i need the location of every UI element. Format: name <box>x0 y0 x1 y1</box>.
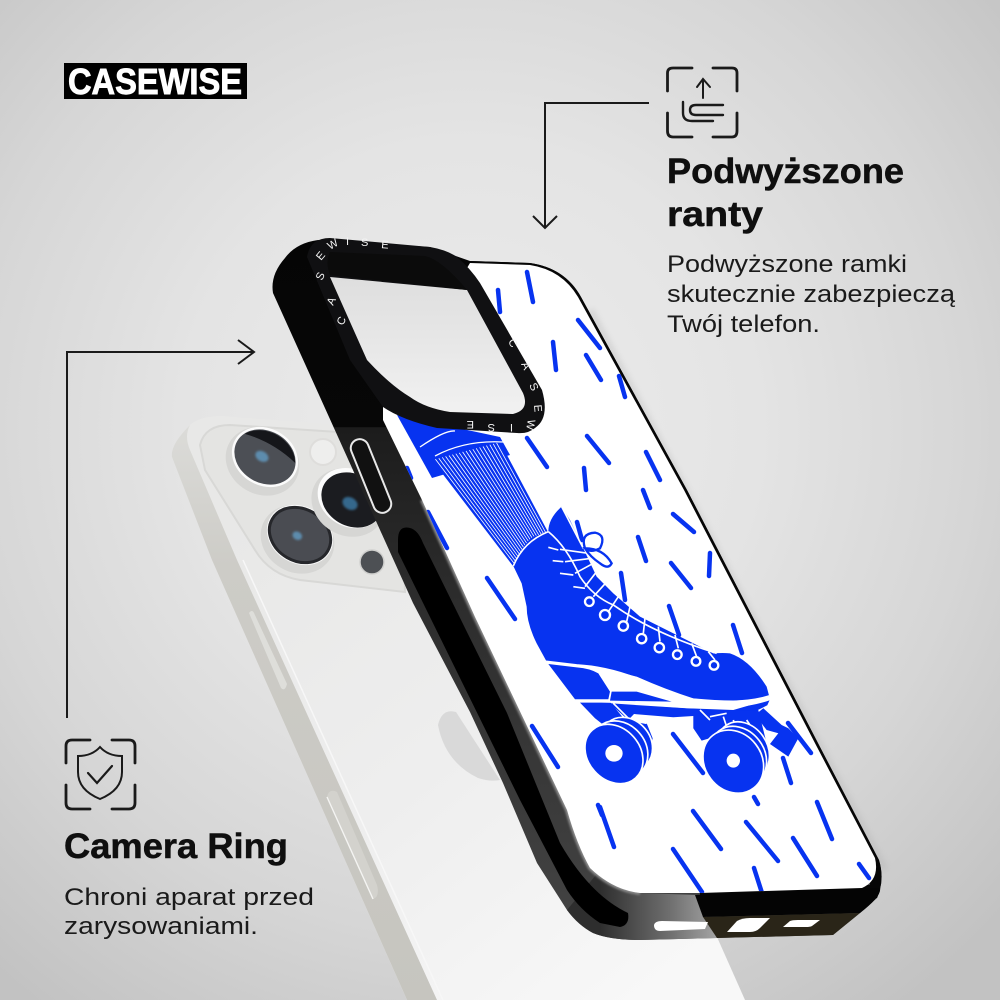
ring inner wall <box>328 252 467 290</box>
back highlight <box>243 560 443 1000</box>
logo: CASEWISE <box>68 61 242 102</box>
right bezel <box>470 261 882 900</box>
side button upper <box>249 611 287 689</box>
rear wheel <box>690 712 780 805</box>
laces <box>548 532 717 660</box>
rain dashes <box>407 272 869 893</box>
sole strip <box>610 692 672 702</box>
rear truck <box>580 703 653 757</box>
front truck <box>693 710 767 770</box>
camera ring <box>307 236 545 433</box>
toe stop <box>755 708 798 757</box>
phone side band <box>172 425 437 1000</box>
side button pill <box>348 436 394 516</box>
icon: shield <box>66 740 135 809</box>
port usb <box>727 918 770 932</box>
eyelets <box>585 597 718 670</box>
port speaker left <box>654 921 708 931</box>
side slot <box>398 528 628 927</box>
arrow: raised edges <box>533 103 649 228</box>
sock stripes <box>432 442 548 566</box>
heading: raised edges: ranty <box>667 195 764 234</box>
boot <box>513 507 769 700</box>
text: raised edges <box>667 251 956 338</box>
side button lower <box>327 791 378 899</box>
text: raised edges: Podwyższone ramki <box>667 251 907 278</box>
case shadow <box>590 310 885 870</box>
sensor <box>360 550 384 574</box>
plate <box>610 699 770 720</box>
case frame <box>272 240 882 940</box>
text: camera ring: Chroni aparat przed <box>64 884 314 911</box>
bottom band <box>695 888 880 917</box>
flash <box>310 439 336 465</box>
text: raised edges: skutecznie zabezpieczą <box>667 281 956 308</box>
text: camera ring <box>64 884 314 940</box>
lower left glossy <box>567 870 717 940</box>
lens top <box>213 413 312 509</box>
side button lower highlight <box>327 797 373 899</box>
ring opening <box>330 277 525 414</box>
heading: raised edges <box>667 152 904 234</box>
ring body <box>307 238 545 433</box>
screen edge glow <box>422 500 640 893</box>
heading: camera ring: Camera Ring <box>64 827 288 866</box>
phone body <box>172 416 745 1000</box>
white iPhone <box>172 413 745 1000</box>
ring lettering: CASEWISECASEWISE <box>314 236 544 433</box>
bottom olive strip <box>703 913 860 938</box>
front wheel <box>573 707 663 795</box>
text: camera ring: zarysowaniami. <box>64 913 258 940</box>
apple logo <box>438 711 500 781</box>
icon: raised edges <box>668 68 737 137</box>
camera plateau <box>200 425 405 592</box>
lens right <box>299 454 398 550</box>
heading: raised edges: Podwyższone <box>667 152 904 191</box>
phone case <box>272 236 885 940</box>
heel <box>548 664 610 699</box>
lens bottom <box>248 491 347 587</box>
port speaker right <box>783 920 820 927</box>
roller skate <box>513 507 798 805</box>
roller skate sock <box>397 415 548 566</box>
boot white lines <box>513 507 770 730</box>
text: raised edges: Twój telefon. <box>667 311 820 338</box>
arrow: camera ring <box>67 340 254 718</box>
sock band <box>397 415 510 478</box>
screen <box>383 263 876 893</box>
bow <box>584 533 612 567</box>
